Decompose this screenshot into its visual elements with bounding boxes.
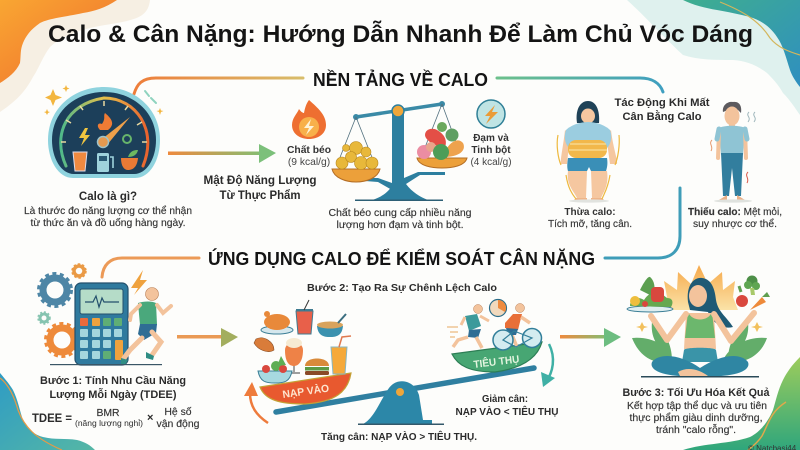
arrow: curved up left <box>244 382 268 423</box>
bowl: expenditure <box>452 342 542 372</box>
text: weight gain: Tăng cân: NẠP VÀO > TIÊU THỤ. <box>321 430 477 443</box>
formula: TDEE: × <box>147 412 153 424</box>
text: calorie deficit: suy nhược cơ thể. <box>693 218 777 230</box>
icon: balance scale <box>332 101 467 201</box>
text: energy density: Mật Độ Năng Lượng <box>204 175 316 187</box>
icon: fat flame <box>292 100 326 139</box>
background blob: top left orange <box>0 0 150 112</box>
icon: sparkles and dashes <box>44 85 164 115</box>
hair <box>688 278 733 328</box>
text: imbalance heading: Cân Bằng Calo <box>622 110 702 123</box>
icon: protein and starch bolt <box>477 100 505 128</box>
arrow: step 1 to step 2 <box>177 328 238 347</box>
figure: overweight woman <box>557 101 619 203</box>
formula: TDEE: TDEE = <box>32 413 72 425</box>
text: protein and starch kcal: Tinh bột <box>471 145 511 156</box>
sparkles <box>636 322 763 332</box>
bowl: expenditure: TIÊU THỤ <box>473 352 520 371</box>
text: weight loss <box>456 393 558 418</box>
formula: TDEE: vận động <box>156 419 200 430</box>
icon: calculator with runner and gears <box>38 264 171 365</box>
sun rays <box>662 265 738 310</box>
formula: TDEE: BMR <box>96 408 120 419</box>
text: protein and starch kcal: (4 kcal/g) <box>470 157 512 168</box>
text: protein and starch kcal <box>470 133 512 168</box>
leaves <box>632 322 767 363</box>
text: energy density: Từ Thực Phẩm <box>220 190 300 202</box>
heading: foundations: NỀN TẢNG VỀ CALO <box>313 69 488 90</box>
text: fat provides more energy: Chất béo cung cấp nhiều năng <box>328 207 472 219</box>
figure: meditating woman with foods <box>627 265 770 378</box>
formula: TDEE: (năng lượng nghỉ) <box>75 418 143 428</box>
text: what is a calorie: Calo là gì? <box>79 191 137 203</box>
text: step 3: Kết hợp tập thể dục và ưu tiên <box>627 400 767 412</box>
formula: TDEE: Hệ số <box>164 406 192 418</box>
icon: fat droplets <box>336 142 378 170</box>
plate of vegetables <box>627 277 673 312</box>
text: step 3: thực phẩm giàu dinh dưỡng, <box>630 412 762 424</box>
text: fat kcal <box>287 144 331 168</box>
floating vegetables <box>736 276 770 310</box>
background blob: bottom right green <box>683 357 800 450</box>
bowl: intake <box>260 373 351 404</box>
connector: gauge to foundations heading <box>134 78 303 94</box>
text: step 3: tránh "calo rỗng". <box>656 423 736 436</box>
figure: tired man <box>711 102 755 203</box>
text: what is a calorie: từ thức ăn và đồ uống hàng ngày. <box>30 217 186 229</box>
background blob: bottom left blue <box>0 373 95 450</box>
bowl: intake: NẠP VÀO <box>282 382 330 401</box>
text: step 1: Bước 1: Tính Nhu Cầu Năng <box>40 375 186 387</box>
text: protein and starch kcal: Đạm và <box>473 133 509 144</box>
text: weight loss: NẠP VÀO < TIÊU THỤ <box>456 405 558 418</box>
arrow: step 2 to step 3 <box>560 328 621 347</box>
text: step 3: Bước 3: Tối Ưu Hóa Kết Quả <box>622 387 770 399</box>
text: what is a calorie <box>24 191 192 229</box>
text: excess calories: Thừa calo: <box>564 207 616 218</box>
text: fat kcal: Chất béo <box>287 144 331 156</box>
text: calorie deficit: Thiếu calo: Mệt mỏi, <box>688 206 782 218</box>
text: fat kcal: (9 kcal/g) <box>288 157 330 168</box>
seesaw with bowls <box>260 342 542 425</box>
text: step 3 <box>622 387 770 436</box>
text: step 2: Bước 2: Tạo Ra Sự Chênh Lệch Calo <box>307 282 497 294</box>
connector: calculator to application heading <box>102 258 199 277</box>
background blob: top right teal <box>627 0 800 115</box>
text: what is a calorie: Là thước đo năng lượng cơ thể nhận <box>24 205 192 217</box>
text: energy density <box>204 175 316 202</box>
text: calorie deficit <box>688 206 782 230</box>
icon: protein and starch foods <box>417 122 464 160</box>
title: Calo & Cân Nặng: Hướng Dẫn Nhanh Để Làm Chủ Vóc Dáng <box>48 20 753 48</box>
icon: calorie gauge <box>44 85 164 178</box>
connector: foundations heading to imbalance <box>497 78 663 92</box>
text: excess calories <box>548 207 632 230</box>
text: imbalance heading <box>614 97 710 123</box>
text: excess calories: Tích mỡ, tăng cân. <box>548 219 632 230</box>
formula: TDEE <box>32 406 200 430</box>
arrow: gauge to energy density <box>168 144 276 163</box>
text: step 1 <box>40 375 186 401</box>
text: fat provides more energy: lượng hơn đạm và tinh bột. <box>336 220 464 231</box>
text: step 1: Lượng Mỗi Ngày (TDEE) <box>50 388 177 401</box>
text: imbalance heading: Tác Động Khi Mất <box>614 97 710 109</box>
heading: application: ỨNG DỤNG CALO ĐỂ KIỂM SOÁT CÂN NẶNG <box>208 248 595 269</box>
text: weight loss: Giảm cân: <box>482 393 528 405</box>
connector: imbalance to application heading <box>605 188 680 258</box>
icon group: foods <box>254 300 351 383</box>
text: fat provides more energy <box>328 207 472 231</box>
icon group: exercisers and clock <box>447 300 542 350</box>
arrow: curved down right <box>541 344 555 387</box>
